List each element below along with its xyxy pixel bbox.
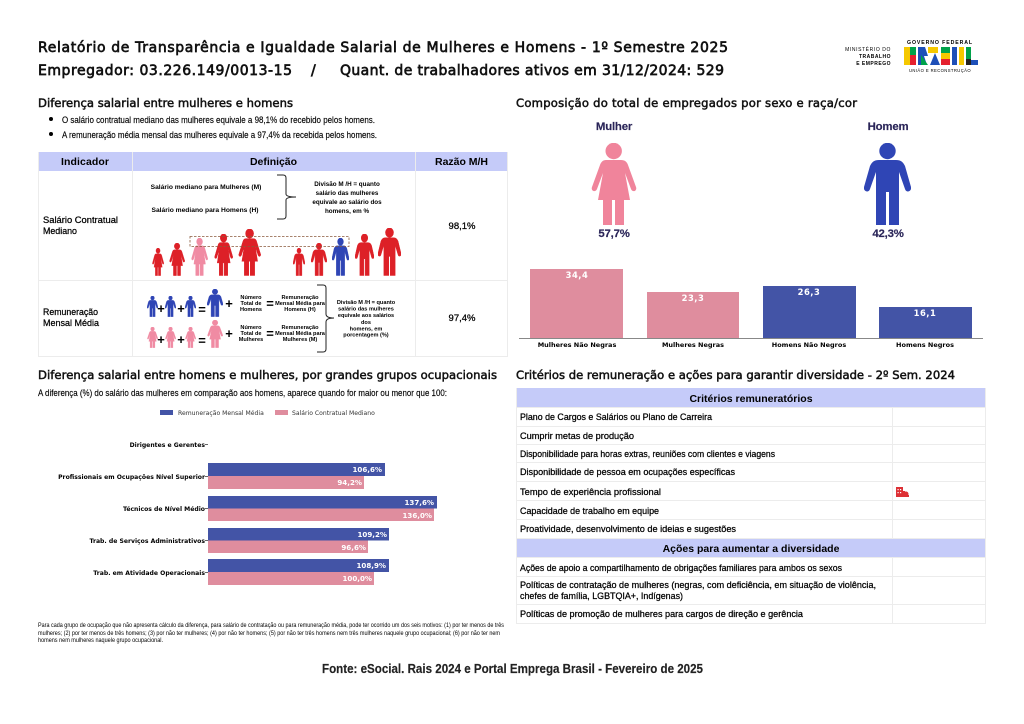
lista de ações bbox=[520, 563, 876, 620]
gráfico de barras: composição: 34,4 bbox=[566, 270, 588, 280]
lista de ações: chefes de família, LGBTQIA+, Indígenas) bbox=[520, 591, 683, 602]
table header: Definição bbox=[250, 156, 297, 168]
definição: divisão M/H: equivale aos salários bbox=[338, 313, 394, 319]
indicador: remuneração: Remuneração bbox=[43, 307, 98, 318]
operadores e textos: homens: Homens (H) bbox=[284, 307, 316, 313]
definição: divisão M/H: dos bbox=[361, 320, 371, 326]
lista de critérios: Tempo de experiência profissional bbox=[520, 487, 661, 498]
gráfico de barras: grupos ocupacionais: Trab. em Atividade Operacionais bbox=[93, 570, 205, 577]
operadores e textos: homens: = bbox=[198, 302, 206, 317]
lista de ações: Políticas de promoção de mulheres para cargos de direção e gerência bbox=[520, 609, 804, 620]
definição: divisão M/H: salário das mulheres bbox=[338, 306, 394, 312]
gráfico de barras: composição: Homens Negros bbox=[896, 341, 954, 349]
nota de rodapé bbox=[38, 623, 504, 644]
gráfico de barras: composição: 16,1 bbox=[914, 308, 936, 318]
operadores e textos: homens: + bbox=[225, 296, 233, 311]
table header bbox=[61, 156, 488, 168]
figura: homem: 42,3% bbox=[872, 228, 904, 240]
table header: Indicador bbox=[61, 156, 109, 168]
definição: divisão M/H: porcentagem (%) bbox=[343, 332, 389, 338]
gráfico de barras: grupos ocupacionais: 106,6% bbox=[352, 465, 382, 474]
bullets: O salário contratual mediano das mulheres equivale a 98,1% do recebido pelos homens. bbox=[62, 115, 375, 126]
nota de rodapé: mulheres; (2) por ter menos de três homens; (3) por não ter mulheres; (4) por não ter homens; (5) por não ter três homens nem três mulheres naquele grupo ocupacional; (6) por não ter nem bbox=[38, 631, 500, 637]
operadores e textos: homens: Homens bbox=[240, 307, 262, 313]
gráfico de barras: grupos ocupacionais: 109,2% bbox=[357, 530, 387, 539]
icones: homens bbox=[293, 228, 401, 276]
cabeçalho: critérios remuneratórios: Critérios remuneratórios bbox=[689, 393, 813, 405]
title bbox=[38, 40, 728, 79]
operadores e textos: mulheres: Mensal Média para bbox=[275, 331, 326, 337]
lista de ações: Políticas de contratação de mulheres (negras, com deficiência, em situação de violência, bbox=[520, 580, 876, 591]
gráfico de barras: composição: 23,3 bbox=[682, 293, 704, 303]
heading: critérios: Critérios de remuneração e ações para garantir diversidade - 2º Sem. 2024 bbox=[516, 368, 955, 382]
operadores e textos: homens: Número bbox=[240, 295, 262, 301]
title: Quant. de trabalhadores ativos em 31/12/2024: 529 bbox=[340, 63, 724, 79]
operadores e textos: mulheres: + bbox=[177, 332, 185, 347]
operadores e textos: homens: + bbox=[157, 301, 165, 316]
operadores e textos: mulheres: Mulheres bbox=[239, 337, 263, 343]
gráfico de barras: composição: Homens Não Negros bbox=[772, 341, 846, 349]
logo: governo federal bbox=[904, 40, 978, 73]
lista de critérios: Capacidade de trabalho em equipe bbox=[520, 506, 659, 517]
operadores e textos: homens: + bbox=[177, 301, 185, 316]
logo: ministério: TRABALHO bbox=[859, 54, 891, 60]
definição: fórmula homens bbox=[147, 289, 223, 317]
gráfico de barras: grupos ocupacionais: Técnicos de Nível Médio bbox=[123, 505, 205, 513]
destaque mediana bbox=[190, 236, 349, 246]
definição: salário mediano: salário das mulheres bbox=[316, 190, 379, 197]
gráfico de barras: composição: Mulheres Negras bbox=[662, 341, 724, 349]
lista de critérios: Proatividade, desenvolvimento de ideias e sugestões bbox=[520, 524, 736, 535]
operadores e textos: mulheres: Total de bbox=[240, 331, 262, 337]
operadores e textos: homens: Remuneração bbox=[282, 295, 319, 301]
definição: salário mediano: Salário mediano para Homens (H) bbox=[151, 207, 259, 214]
logo: governo federal: UNIÃO E RECONSTRUÇÃO bbox=[909, 68, 971, 73]
legenda: Remuneração Mensal Média bbox=[178, 409, 264, 417]
definição: salário mediano: Salário mediano para Mulheres (M) bbox=[151, 184, 261, 191]
logo: ministério: E EMPREGO bbox=[856, 61, 891, 67]
gráfico de barras: grupos ocupacionais: Profissionais em Ocupações Nível Superior bbox=[58, 473, 205, 481]
lista de critérios bbox=[520, 412, 775, 535]
legenda bbox=[160, 409, 375, 417]
definição: salário mediano: equivale ao salário dos bbox=[312, 199, 382, 206]
gráfico de barras: grupos ocupacionais bbox=[58, 442, 437, 585]
operadores e textos: homens: Mensal Média para bbox=[275, 301, 326, 307]
title: Empregador: 03.226.149/0013-15 bbox=[38, 63, 292, 79]
definição: divisão M/H bbox=[317, 285, 396, 352]
gráfico de barras: grupos ocupacionais: Dirigentes e Gerentes bbox=[130, 442, 205, 449]
operadores e textos: mulheres: Mulheres (M) bbox=[283, 337, 317, 343]
definição: salário mediano: homens, em % bbox=[325, 208, 369, 215]
heading: composição: Composição do total de empregados por sexo e raça/cor bbox=[516, 96, 857, 110]
gráfico de barras: composição: Mulheres Não Negras bbox=[538, 341, 616, 349]
logo: ministério: MINISTÉRIO DO bbox=[845, 46, 891, 53]
gráfico de barras: grupos ocupacionais: 96,6% bbox=[341, 543, 366, 552]
figura: mulher: Mulher bbox=[596, 121, 633, 133]
lista de critérios: Disponibilidade de pessoa em ocupações específicas bbox=[520, 467, 735, 478]
bullets bbox=[49, 115, 377, 141]
gráfico de barras: grupos ocupacionais: Trab. de Serviços Administrativos bbox=[89, 538, 205, 545]
logo: governo federal: GOVERNO FEDERAL bbox=[907, 40, 973, 46]
cabeçalho: ações: Ações para aumentar a diversidade bbox=[663, 543, 840, 555]
definição: divisão M/H: homens, em bbox=[350, 326, 382, 332]
lista de critérios: Plano de Cargos e Salários ou Plano de Carreira bbox=[520, 412, 713, 423]
figura: homem bbox=[864, 121, 911, 240]
operadores e textos: homens: Total de bbox=[240, 301, 262, 307]
heading: diferença salarial: Diferença salarial entre mulheres e homens bbox=[38, 96, 293, 110]
gráfico de barras: composição bbox=[519, 269, 983, 349]
figura: homem: Homem bbox=[868, 121, 908, 133]
indicador: salário contratual: Mediano bbox=[43, 226, 77, 237]
operadores e textos: mulheres: + bbox=[157, 332, 165, 347]
nota de rodapé: Para cada grupo de ocupação que não apresenta cálculo da diferença, para salário de contratação ou para remuneração média, pode ter ocorrido um dos seis motivos: (1) por ter menos de três bbox=[38, 623, 504, 629]
heading: grupos ocupacionais: Diferença salarial entre homens e mulheres, por grandes grupos ocupacionais bbox=[38, 368, 497, 382]
indicador: salário contratual: Salário Contratual bbox=[43, 215, 118, 226]
legenda: Salário Contratual Mediano bbox=[292, 409, 375, 417]
definição: salário mediano bbox=[151, 175, 382, 219]
operadores e textos: mulheres: = bbox=[198, 333, 206, 348]
gráfico de barras: composição: 26,3 bbox=[798, 287, 820, 297]
indicador: remuneração: Mensal Média bbox=[43, 318, 100, 329]
gráfico de barras: grupos ocupacionais: 108,9% bbox=[356, 561, 386, 570]
operadores e textos: mulheres: Número bbox=[240, 325, 262, 331]
indicador: salário contratual bbox=[43, 215, 476, 237]
title: Relatório de Transparência e Igualdade Salarial de Mulheres e Homens - 1º Semestre 2025 bbox=[38, 40, 728, 56]
figura: mulher bbox=[592, 121, 636, 240]
operadores e textos: mulheres: + bbox=[225, 326, 233, 341]
gráfico de barras: grupos ocupacionais: 137,6% bbox=[404, 498, 434, 507]
lista de ações: Ações de apoio a compartilhamento de obrigações familiares para ambos os sexos bbox=[520, 563, 842, 574]
nota de rodapé: homens nem mulheres naquele grupo ocupacional. bbox=[38, 638, 163, 644]
gráfico de barras: grupos ocupacionais: 94,2% bbox=[337, 478, 362, 487]
definição: divisão M/H: Divisão M /H = quanto bbox=[337, 300, 396, 306]
operadores e textos: homens: = bbox=[266, 296, 274, 311]
gráfico de barras: grupos ocupacionais: 136,0% bbox=[402, 511, 432, 520]
operadores e textos: mulheres bbox=[157, 325, 326, 348]
gráfico de barras: grupos ocupacionais: 100,0% bbox=[342, 574, 372, 583]
figura: mulher: 57,7% bbox=[598, 228, 630, 240]
panel: critérios e ações bbox=[516, 388, 986, 624]
subtítulo do gráfico: A diferença (%) do salário das mulheres em comparação aos homens, aparece quando for maior ou menor que 100: bbox=[38, 388, 447, 399]
definição: fórmula mulheres bbox=[147, 320, 223, 348]
indicador: salário contratual: 98,1% bbox=[449, 221, 476, 232]
title: / bbox=[311, 63, 316, 79]
panel: tabela de indicadores bbox=[38, 152, 508, 357]
logo: ministério bbox=[845, 46, 891, 67]
icon: empresa bbox=[896, 487, 909, 497]
lista de critérios: Cumprir metas de produção bbox=[520, 431, 634, 442]
indicador: remuneração: 97,4% bbox=[449, 313, 476, 324]
operadores e textos: mulheres: = bbox=[266, 326, 274, 341]
bullets: A remuneração média mensal das mulheres equivale a 97,4% da recebida pelos homens. bbox=[62, 130, 377, 141]
icones: mulheres bbox=[152, 229, 261, 276]
fonte: Fonte: eSocial. Rais 2024 e Portal Emprega Brasil - Fevereiro de 2025 bbox=[322, 662, 703, 676]
lista de critérios: Disponibilidade para horas extras, reuniões com clientes e viagens bbox=[520, 449, 775, 460]
operadores e textos: mulheres: Remuneração bbox=[282, 325, 319, 331]
operadores e textos: homens bbox=[157, 295, 326, 317]
definição: salário mediano: Divisão M /H = quanto bbox=[314, 181, 380, 188]
table header: Razão M/H bbox=[435, 156, 488, 168]
indicador: remuneração bbox=[43, 307, 476, 329]
